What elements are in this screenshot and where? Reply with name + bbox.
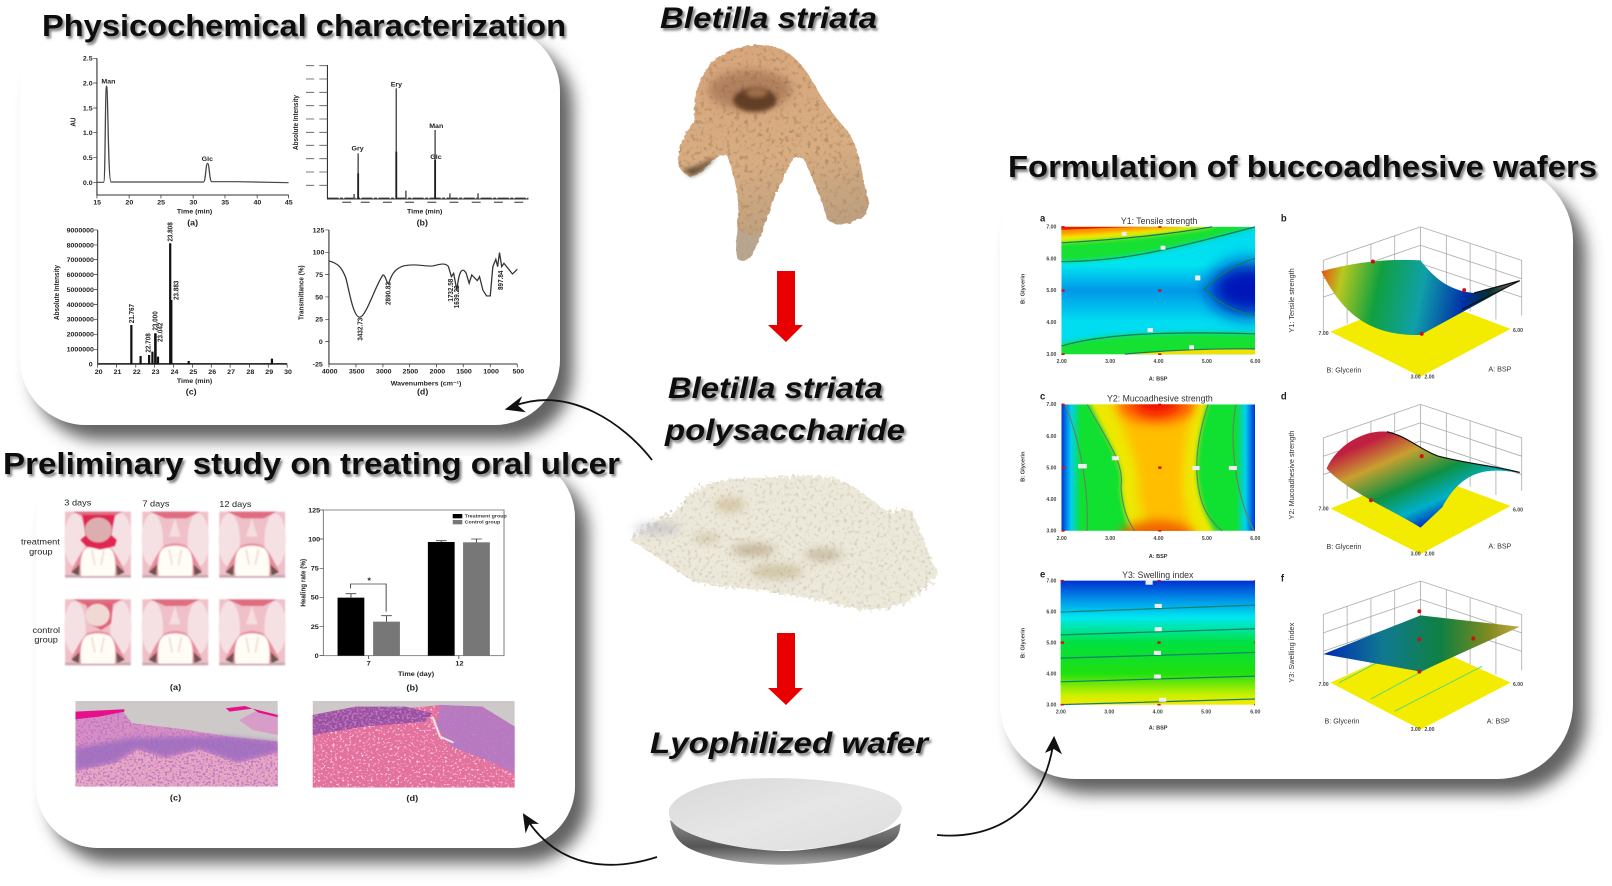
3D surface plot d: B: Glycerin: [1326, 542, 1361, 551]
icon: polysaccharide powder: [630, 476, 938, 611]
bar chart: healing rate: 12: [455, 661, 464, 668]
chart a: HPLC chromatogram: 0.0: [83, 180, 93, 187]
contour plot c: mucoadhesive strength: A: BSP: [1149, 554, 1168, 560]
chart a: HPLC chromatogram: 2.0: [83, 81, 93, 87]
chart c: GC-MS peaks: 22: [133, 369, 141, 376]
chart a: HPLC chromatogram: Glc: [202, 156, 213, 163]
3D surface plot b: Y1: Tensile strength: [1287, 268, 1296, 333]
chart b: GC-MS total ion chromatogram: Glc: [430, 154, 442, 161]
chart b: GC-MS total ion chromatogram: Ery: [391, 82, 402, 89]
3D surface plot f: [1281, 573, 1523, 733]
chart c: GC-MS peaks: 29: [265, 369, 273, 376]
3D surface plot b: 7.00: [1319, 331, 1329, 337]
chart c: GC-MS peaks: 7000000: [67, 257, 94, 264]
contour plot a: tensile strength: A: BSP: [1149, 377, 1168, 383]
title: Bletilla striata: Bletilla striata: [660, 2, 877, 35]
photos: rat oral ulcers: [21, 498, 286, 665]
chart c: GC-MS peaks: 24: [171, 369, 179, 376]
chart c: GC-MS peaks: 5000000: [67, 287, 94, 294]
contour plot a: tensile strength: 5.00: [1046, 288, 1056, 294]
contour plot e: swelling index: 3.00: [1104, 710, 1114, 716]
3D surface plot f: 3.00: [1411, 727, 1421, 733]
3D surface plot b: [1281, 213, 1523, 381]
chart a: HPLC chromatogram: 30: [189, 200, 198, 207]
chart a: HPLC chromatogram: 1.5: [83, 106, 93, 112]
chart d: FT-IR spectrum: (d): [417, 387, 429, 396]
panel: formulation of buccoadhesive wafers: [1000, 165, 1573, 779]
arrow: wafer to formulation: [937, 738, 1060, 836]
contour plot e: swelling index: 4.00: [1153, 710, 1163, 716]
bar chart: healing rate: 7: [367, 661, 371, 668]
contour plot e: swelling index: 2.00: [1056, 710, 1066, 716]
title: Bletilla striata polysaccharide: polysaccharide: [664, 414, 905, 447]
bar chart: healing rate: 50: [311, 595, 319, 602]
chart d: FT-IR spectrum: 3000: [376, 369, 392, 375]
chart b: GC-MS total ion chromatogram: Gry: [352, 146, 364, 153]
chart d: FT-IR spectrum: 897.84: [498, 270, 505, 290]
title: Lyophilized wafer: Lyophilized wafer: [650, 727, 931, 760]
3D surface plot f: B: Glycerin: [1325, 716, 1359, 725]
contour plot e: swelling index: A: BSP: [1149, 726, 1168, 732]
3D surface plot b: B: Glycerin: [1326, 365, 1361, 375]
chart d: FT-IR spectrum: [298, 228, 524, 396]
contour plot c: mucoadhesive strength: 5.00: [1046, 465, 1056, 471]
arrow: powder to physicochemical characterization: [507, 399, 652, 460]
chart a: HPLC chromatogram: 15: [93, 200, 101, 207]
chart c: GC-MS peaks: 4000000: [67, 302, 94, 309]
chart d: FT-IR spectrum: 500: [512, 369, 524, 375]
3D surface plot f: 7.00: [1319, 682, 1329, 688]
contour plot e: swelling index: [1021, 569, 1260, 732]
3D surface plot d: Y2: Mucoadhesive strength: [1287, 431, 1296, 519]
chart a: HPLC chromatogram: 1.0: [83, 130, 93, 137]
chart c: GC-MS peaks: 23.042: [157, 322, 165, 342]
chart d: FT-IR spectrum: 4000: [322, 369, 338, 375]
contour plot e: swelling index: 7.00: [1046, 578, 1056, 584]
micrograph c: treatment histology: [75, 701, 278, 787]
3D surface plot d: [1281, 391, 1523, 557]
heading: Physicochemical characterization: Physicochemical characterization: [42, 8, 566, 43]
chart a: HPLC chromatogram: Time (min): [177, 209, 212, 216]
chart b: GC-MS total ion chromatogram: Absolute Intensity: [293, 95, 300, 150]
bar chart: healing rate: Healing rate (%): [300, 559, 308, 607]
bar chart: healing rate: 75: [311, 566, 319, 573]
chart d: FT-IR spectrum: 2000: [430, 369, 445, 375]
contour plot a: tensile strength: B: Glycerin: [1021, 273, 1026, 304]
chart d: FT-IR spectrum: 2890.82: [385, 282, 393, 305]
title: Bletilla striata polysaccharide: Bletilla striata: [668, 372, 883, 405]
chart c: GC-MS peaks: 26: [208, 369, 216, 376]
contour plot a: tensile strength: 5.00: [1202, 359, 1212, 365]
chart d: FT-IR spectrum: 50: [315, 295, 323, 301]
chart d: FT-IR spectrum: 3500: [349, 369, 365, 375]
figure caption b: (b): [406, 683, 418, 692]
chart d: FT-IR spectrum: 1732.58: [448, 278, 455, 302]
chart c: GC-MS peaks: Absolute Intensity: [54, 265, 61, 320]
chart a: HPLC chromatogram: 35: [221, 200, 229, 207]
contour plot c: mucoadhesive strength: Y2: Mucoadhesive strength: [1107, 393, 1213, 404]
photos: rat oral ulcers: treatment: [21, 537, 60, 546]
contour plot a: tensile strength: 2.00: [1057, 359, 1067, 365]
chart c: GC-MS peaks: 23.000: [152, 311, 160, 331]
figure caption c: (c): [170, 793, 181, 802]
3D surface plot d: 3.00: [1411, 551, 1421, 557]
bar chart: healing rate: 100: [308, 537, 320, 543]
chart d: FT-IR spectrum: 3432.73: [357, 317, 365, 341]
3D surface plot f: f: [1281, 573, 1285, 584]
contour plot a: tensile strength: 3.00: [1046, 352, 1056, 358]
figure caption a: (a): [170, 683, 181, 692]
chart c: GC-MS peaks: 27: [227, 369, 235, 376]
3D surface plot f: Y3: Swelling index: [1287, 622, 1296, 683]
contour plot c: mucoadhesive strength: 7.00: [1046, 402, 1056, 408]
chart a: HPLC chromatogram: Man: [101, 79, 115, 85]
panel: physicochemical characterization: [20, 26, 560, 425]
bar chart: healing rate: Time (day): [398, 671, 434, 678]
chart c: GC-MS peaks: Time (min): [177, 378, 212, 385]
contour plot e: swelling index: 4.00: [1046, 671, 1056, 677]
chart c: GC-MS peaks: 1000000: [67, 347, 94, 354]
chart a: HPLC chromatogram: AU: [70, 117, 78, 127]
chart b: GC-MS total ion chromatogram: (b): [417, 218, 428, 228]
photos: rat oral ulcers: control: [33, 626, 60, 635]
chart b: GC-MS total ion chromatogram: Man: [429, 123, 443, 130]
chart a: HPLC chromatogram: 2.5: [83, 56, 93, 63]
chart d: FT-IR spectrum: 125: [313, 228, 325, 234]
bar chart: healing rate: 125: [308, 508, 320, 514]
chart a: HPLC chromatogram: 20: [125, 200, 134, 207]
contour plot c: mucoadhesive strength: 3.00: [1105, 536, 1115, 542]
bar chart: healing rate: [300, 508, 507, 678]
photos: rat oral ulcers: 3 days: [64, 498, 91, 508]
contour plot a: tensile strength: 6.00: [1046, 256, 1056, 262]
title: Bletilla striata polysaccharide: [664, 372, 905, 447]
chart c: GC-MS peaks: 21: [114, 369, 122, 376]
3D surface plot b: 2.00: [1424, 375, 1435, 381]
contour plot e: swelling index: 5.00: [1201, 710, 1211, 716]
contour plot a: tensile strength: Y1: Tensile strength: [1121, 216, 1197, 226]
chart a: HPLC chromatogram: 45: [285, 200, 293, 207]
3D surface plot d: A: BSP: [1488, 541, 1512, 550]
contour plot e: swelling index: 5.00: [1046, 640, 1056, 646]
contour plot e: swelling index: 3.00: [1046, 702, 1056, 708]
chart d: FT-IR spectrum: 25: [315, 317, 323, 324]
contour plot c: mucoadhesive strength: B: Glycerin: [1021, 451, 1026, 482]
contour plot c: mucoadhesive strength: 2.00: [1057, 536, 1067, 542]
contour plot c: mucoadhesive strength: 4.00: [1046, 497, 1056, 503]
contour plot a: tensile strength: a: [1040, 213, 1046, 225]
chart d: FT-IR spectrum: 1500: [456, 369, 472, 375]
chart c: GC-MS peaks: 23.883: [173, 280, 180, 300]
contour plot a: tensile strength: 3.00: [1105, 359, 1115, 365]
chart c: GC-MS peaks: 23.808: [167, 222, 175, 242]
chart d: FT-IR spectrum: Wavenumbers (cm⁻¹): [391, 381, 461, 388]
bar chart: healing rate: Treatment group: [465, 514, 507, 520]
contour plot c: mucoadhesive strength: c: [1040, 391, 1046, 403]
bar chart: healing rate: *: [367, 576, 372, 585]
panel: preliminary study on treating oral ulcer: [36, 456, 575, 848]
photos: rat oral ulcers: group: [34, 635, 58, 644]
3D surface plot b: 6.00: [1513, 328, 1523, 334]
bar chart: healing rate: Control group: [465, 520, 500, 526]
chart c: GC-MS peaks: 28: [246, 369, 255, 376]
contour plot e: swelling index: e: [1040, 569, 1046, 580]
chart b: GC-MS total ion chromatogram: Time (min): [407, 209, 442, 216]
chart c: GC-MS peaks: 0: [89, 362, 93, 369]
chart c: GC-MS peaks: 2000000: [67, 332, 94, 339]
contour plot a: tensile strength: 7.00: [1046, 224, 1056, 231]
chart d: FT-IR spectrum: 75: [315, 272, 323, 279]
photos: rat oral ulcers: group: [29, 547, 53, 556]
3D surface plot f: 6.00: [1513, 682, 1523, 688]
3D surface plot d: d: [1281, 391, 1287, 403]
chart c: GC-MS peaks: 9000000: [67, 228, 94, 234]
chart d: FT-IR spectrum: 1000: [483, 369, 499, 375]
figures: oral ulcer study: [21, 498, 515, 803]
chart a: HPLC chromatogram: 40: [253, 200, 262, 207]
3D surface plot d: 6.00: [1513, 507, 1523, 513]
chart c: GC-MS peaks: 20: [95, 369, 103, 376]
chart a: HPLC chromatogram: 0.5: [83, 155, 93, 162]
chart c: GC-MS peaks: 25: [189, 369, 198, 376]
3D surface plot f: 2.00: [1424, 727, 1435, 733]
3D surface plot b: b: [1281, 213, 1287, 225]
3D surface plot b: 3.00: [1411, 375, 1421, 381]
charts: physicochemical characterization: [54, 56, 528, 396]
contour plot e: swelling index: 6.00: [1250, 710, 1260, 716]
contour plot e: swelling index: B: Glycerin: [1021, 627, 1026, 658]
contour plot c: mucoadhesive strength: 6.00: [1046, 434, 1056, 440]
chart c: GC-MS peaks: 22.708: [145, 333, 153, 353]
contour plot a: tensile strength: 4.00: [1153, 359, 1164, 365]
contour plot c: mucoadhesive strength: [1021, 387, 1260, 560]
contour plot e: swelling index: Y3: Swelling index: [1122, 570, 1194, 580]
chart d: FT-IR spectrum: -25: [313, 362, 323, 368]
heading: Formulation of buccoadhesive wafers: Formulation of buccoadhesive wafers: [1008, 149, 1597, 184]
chart d: FT-IR spectrum: 100: [313, 250, 325, 257]
center column: materials: [630, 45, 938, 865]
figure caption d: (d): [406, 794, 418, 803]
micrograph d: control histology: [312, 701, 515, 788]
photos: rat oral ulcers: 7 days: [142, 499, 169, 508]
icon: Bletilla striata rhizome: [678, 45, 869, 261]
contour plot c: mucoadhesive strength: 6.00: [1250, 536, 1260, 542]
contour plot c: mucoadhesive strength: 5.00: [1202, 536, 1212, 542]
3D surface plot d: 7.00: [1319, 506, 1329, 512]
chart d: FT-IR spectrum: 0: [319, 339, 323, 346]
3D surface plot d: 2.00: [1424, 551, 1435, 557]
chart c: GC-MS peaks: [54, 222, 292, 396]
arrow: rhizome to polysaccharide: [768, 271, 803, 342]
chart b: GC-MS total ion chromatogram: [293, 65, 528, 228]
chart c: GC-MS peaks: 3000000: [67, 317, 94, 324]
arrow: wafer to oral ulcer study: [524, 815, 657, 865]
chart d: FT-IR spectrum: 2500: [403, 369, 418, 375]
3D surface plot f: A: BSP: [1487, 716, 1510, 725]
chart d: FT-IR spectrum: 1639.22: [454, 285, 461, 308]
chart d: FT-IR spectrum: Transmittance (%): [298, 265, 306, 320]
icon: lyophilized wafer: [669, 778, 902, 865]
contour plot c: mucoadhesive strength: 4.00: [1153, 536, 1164, 542]
figures: response surface plots: [1021, 213, 1523, 733]
bar chart: healing rate: 25: [311, 624, 319, 631]
photos: rat oral ulcers: 12 days: [219, 500, 251, 509]
bar chart: healing rate: 0: [315, 653, 319, 660]
chart c: GC-MS peaks: 30: [284, 369, 292, 376]
contour plot a: tensile strength: 6.00: [1250, 359, 1260, 365]
chart c: GC-MS peaks: 8000000: [67, 243, 94, 249]
chart c: GC-MS peaks: 23: [152, 369, 160, 376]
arrow: powder to wafer: [768, 633, 803, 705]
chart a: HPLC chromatogram: (a): [187, 218, 198, 228]
chart c: GC-MS peaks: (c): [186, 387, 197, 396]
contour plot e: swelling index: 6.00: [1046, 609, 1056, 615]
chart a: HPLC chromatogram: 25: [157, 200, 165, 207]
chart a: HPLC chromatogram: [70, 56, 293, 228]
heading: Preliminary study on treating oral ulcer: Preliminary study on treating oral ulcer: [3, 446, 620, 481]
chart c: GC-MS peaks: 21.767: [129, 304, 136, 323]
contour plot c: mucoadhesive strength: 3.00: [1046, 528, 1056, 535]
contour plot a: tensile strength: 4.00: [1046, 320, 1056, 326]
contour plot a: tensile strength: [1021, 213, 1286, 383]
chart c: GC-MS peaks: 6000000: [67, 272, 94, 279]
3D surface plot b: A: BSP: [1488, 365, 1512, 374]
